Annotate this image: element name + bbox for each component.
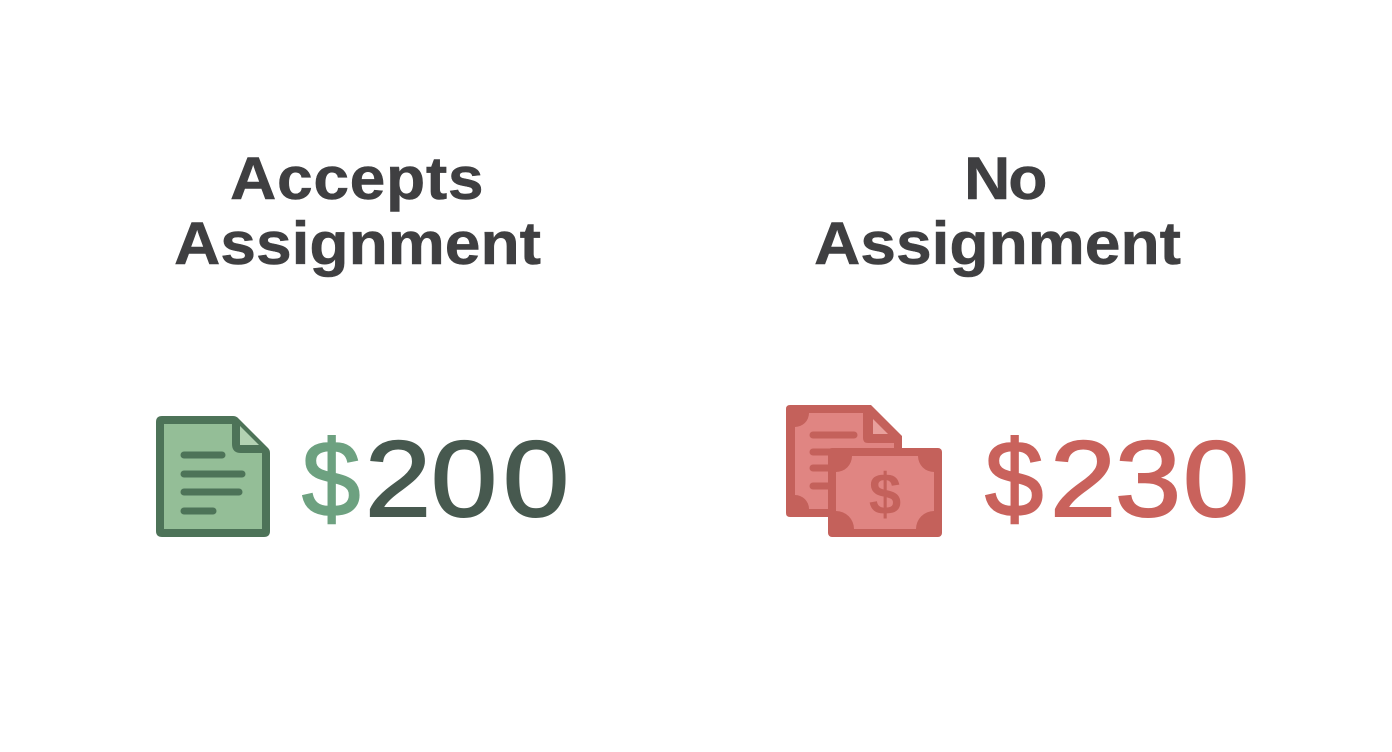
heading: accepts assignment: Accepts — [230, 146, 484, 213]
value: $200: $ — [302, 419, 360, 539]
icon: green document — [156, 416, 270, 537]
value: $230: 3 — [1115, 419, 1181, 540]
heading: no assignment: Assignment — [814, 211, 1181, 278]
value: $230: $ — [985, 419, 1043, 539]
heading: accepts assignment: Assignment — [174, 211, 541, 278]
value: $230: 2 — [1050, 419, 1116, 540]
heading: accepts assignment — [174, 146, 541, 278]
document — [786, 405, 902, 517]
heading: no assignment: No — [964, 146, 1047, 213]
value: $230: 0 — [1183, 419, 1249, 540]
icon: red document and banknote — [786, 405, 942, 537]
panel: no assignment — [786, 146, 1249, 540]
value: $200: 0 — [503, 419, 569, 540]
value: $200: 2 — [365, 419, 431, 540]
banknote — [828, 448, 942, 537]
value: $200 — [302, 419, 569, 540]
heading: no assignment — [814, 146, 1181, 278]
value: $230 — [985, 419, 1249, 540]
value: $200: 0 — [431, 419, 497, 540]
panel: accepts assignment — [156, 146, 569, 540]
banknote: $ — [869, 462, 901, 527]
